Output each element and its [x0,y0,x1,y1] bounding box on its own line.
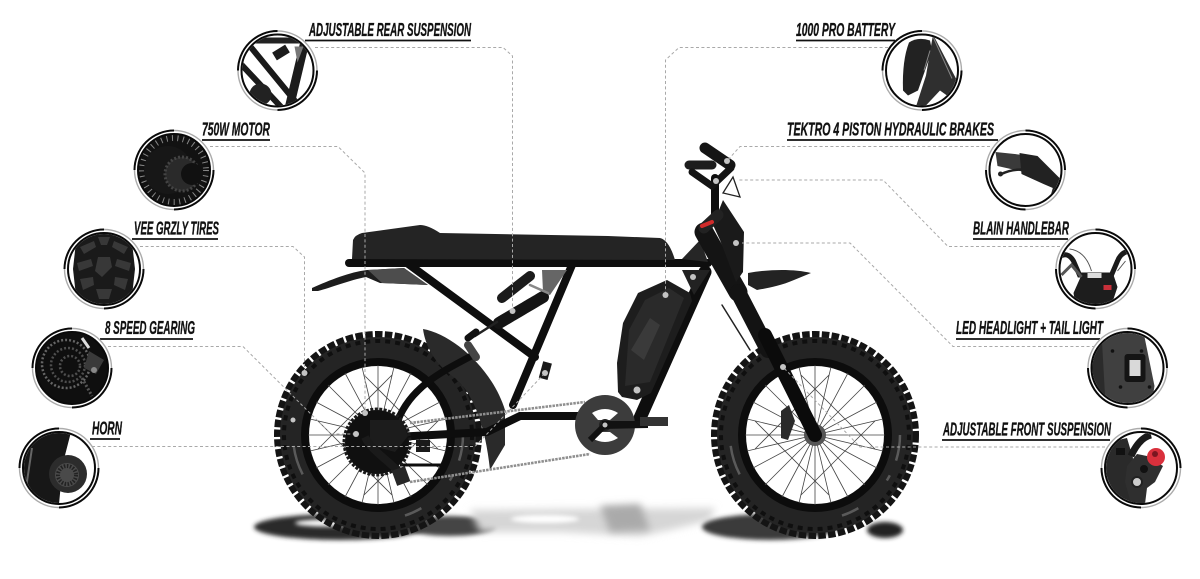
anchor dot [713,178,719,184]
icon: suspension adjuster [1102,428,1180,508]
headlight plate [713,200,744,282]
seat [352,225,675,260]
frame tubes [349,263,708,418]
callout: blain handlebar [713,178,1135,308]
icon: tire tread [64,230,144,308]
handlebar and stem [689,148,740,228]
callout: vee grzly tires [64,218,308,376]
anchor dot [724,158,730,164]
icon: handlebar [1056,230,1135,308]
gusset [682,240,710,295]
icon: battery [882,31,962,110]
label: 1000 PRO BATTERY [796,20,896,40]
callout: adjustable rear suspension [238,20,516,314]
shock bracket [542,270,567,295]
leader line [783,367,1105,447]
callout: 1000 pro battery [662,20,962,298]
leader line [92,373,545,446]
electric bike illustration [278,148,916,536]
callout: adjustable front suspension [780,364,1180,508]
callout: tektro brakes [724,120,1065,210]
callout: horn [20,370,548,508]
leader line [108,346,355,434]
anchor dot [510,308,516,314]
icon: cassette [32,328,112,408]
kickstand bracket [539,361,552,380]
label: BLAIN HANDLEBAR [973,218,1069,238]
icon: horn [20,428,98,508]
leader line [727,146,990,161]
rear plate detail [368,268,428,285]
anchor dot [302,370,308,376]
label: VEE GRZLY TIRES [134,218,219,238]
anchor dot [542,370,548,376]
rear swingarm [395,353,580,465]
icon: hub motor [134,130,214,210]
label: HORN [92,418,123,438]
rear shock [468,276,548,357]
callout: 8 speed gearing [32,318,359,437]
icon: headlight [1088,328,1167,408]
leader line [742,243,1095,346]
front mudguard [748,270,811,290]
rear wheel [278,334,478,536]
leader line [666,48,888,295]
label: ADJUSTABLE REAR SUSPENSION [308,20,472,40]
label: TEKTRO 4 PISTON HYDRAULIC BRAKES [787,120,994,140]
battery [617,280,692,400]
leader line [738,180,1060,246]
callout: led headlight and tail light [733,240,1167,408]
anchor dot [780,364,786,370]
icon: brake lever [986,130,1065,210]
label: 750W MOTOR [202,120,270,140]
front wheel [714,334,916,536]
leader line [210,146,365,413]
chain [410,402,590,482]
leader line [140,246,304,373]
chainring [575,395,668,455]
fork and head tube [704,232,815,435]
anchor dot [662,292,668,298]
hub motor and cassette [344,409,430,486]
label: 8 SPEED GEARING [105,318,195,338]
additional anchor dots [290,274,696,428]
anchor dot [733,240,739,246]
icon: rear suspension [238,31,317,110]
rear mudguard and plate [312,268,428,291]
anchor dot [362,410,368,416]
callout: 750W motor [134,120,368,416]
rear fender [423,329,505,470]
leader line [315,48,512,311]
ground shadow [254,504,903,540]
anchor dot [353,431,359,437]
